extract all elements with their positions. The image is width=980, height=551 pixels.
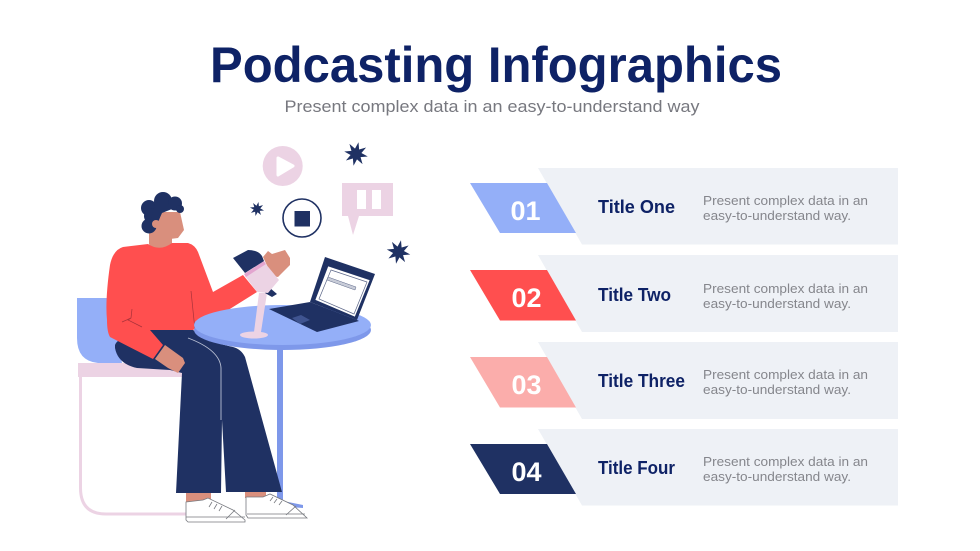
number tab 3 — [470, 357, 576, 408]
number tab 1 — [470, 183, 576, 233]
item title 3: Title Three — [598, 371, 685, 391]
item description 3: Present complex data in an — [703, 367, 868, 382]
step 1 — [470, 168, 898, 244]
item description 2: Present complex data in an — [703, 281, 868, 296]
chair — [77, 298, 186, 514]
item description 3: easy-to-understand way. — [703, 382, 851, 397]
table leg — [277, 345, 303, 508]
card background 4 — [538, 429, 898, 506]
number tab 2: 02 — [511, 283, 542, 313]
icon: star right — [384, 238, 413, 266]
face — [152, 212, 184, 239]
number tab 3: 03 — [511, 370, 542, 400]
card background 2 — [538, 255, 898, 332]
ankles — [186, 492, 266, 502]
item description 1: Present complex data in an — [703, 193, 868, 208]
icon: stop button — [283, 199, 321, 237]
step 4 — [470, 429, 898, 506]
neck — [149, 222, 172, 250]
lower hand — [155, 345, 185, 373]
ear — [152, 220, 160, 228]
item description 4: Present complex data in an — [703, 454, 868, 469]
icon: star small — [248, 200, 266, 218]
icon: star top — [342, 140, 370, 168]
item description 2: easy-to-understand way. — [703, 296, 851, 311]
subtitle: Present complex data in an easy-to-understand way — [284, 97, 700, 116]
sweater — [106, 243, 257, 359]
step 3 — [470, 342, 898, 419]
title: Podcasting Infographics — [210, 37, 782, 93]
step 2 — [470, 255, 898, 332]
upper hand — [263, 250, 290, 277]
number tab 4: 04 — [511, 457, 542, 487]
item title 2: Title Two — [598, 285, 671, 305]
microphone — [233, 250, 279, 338]
shoes — [186, 494, 307, 522]
number tab 4 — [470, 444, 576, 494]
item description 4: easy-to-understand way. — [703, 469, 851, 484]
number tab 2 — [470, 270, 576, 320]
icon: play button — [263, 146, 303, 186]
card background 3 — [538, 342, 898, 419]
item title 1: Title One — [598, 197, 675, 217]
hair — [141, 192, 184, 234]
illustration: podcaster at table — [77, 192, 375, 522]
card background 1 — [538, 168, 898, 244]
item description 1: easy-to-understand way. — [703, 208, 851, 223]
item title 4: Title Four — [598, 458, 675, 478]
icon: pause speech bubble — [342, 183, 393, 235]
trousers — [115, 330, 282, 493]
number tab 1: 01 — [510, 196, 541, 226]
laptop — [269, 257, 375, 332]
table top — [194, 305, 371, 350]
